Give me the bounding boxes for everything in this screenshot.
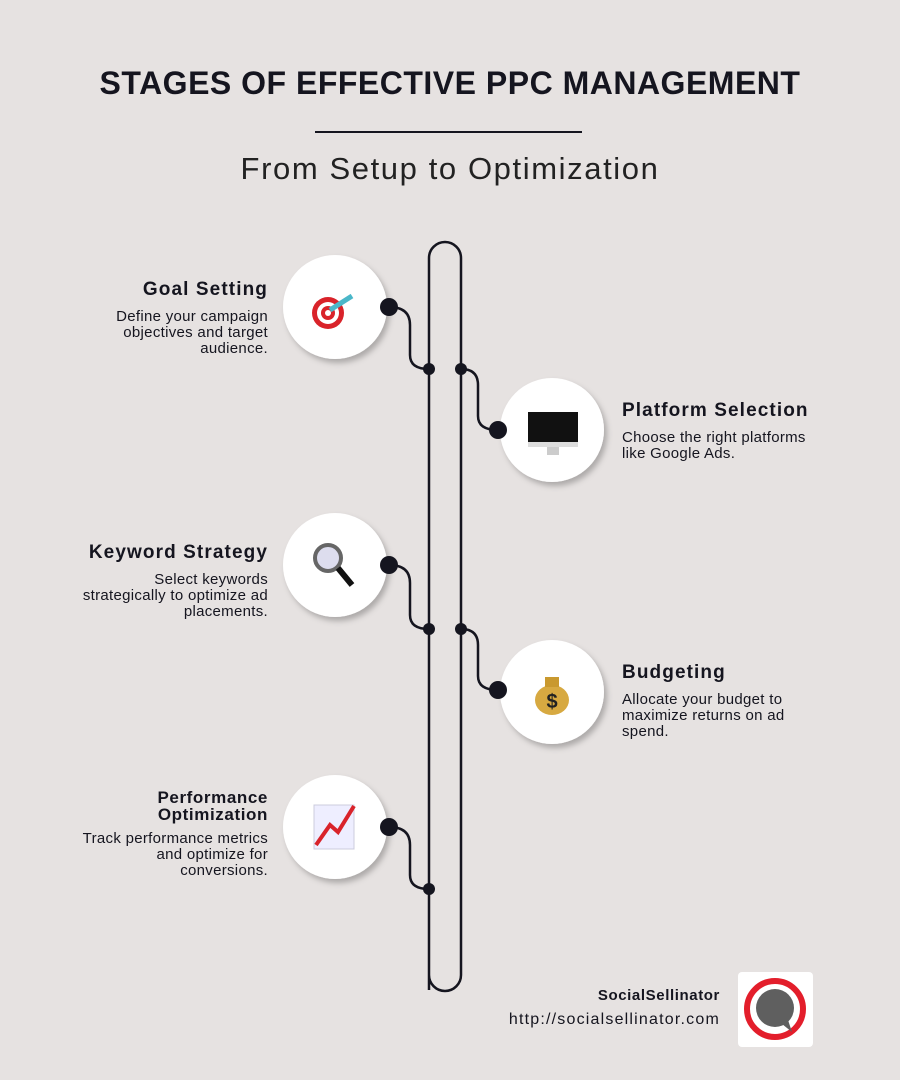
stage: performance optimization [82,788,268,879]
subtitle: From Setup to Optimization [241,151,659,186]
stage: budgeting: spend. [622,723,669,740]
stage: keyword strategy: placements. [184,603,268,620]
stage: goal setting: objectives and target [123,324,268,341]
icon: magnifier [315,545,352,585]
logo [738,972,813,1047]
stage: budgeting: Allocate your budget to [622,691,782,708]
stage: budgeting: maximize returns on ad [622,707,784,724]
stage: budgeting: Budgeting [622,662,726,683]
stage: goal setting: audience. [200,340,268,357]
stage: goal setting: Goal Setting [143,279,268,300]
stage: performance optimization: Optimization [158,805,268,824]
icon: monitor [528,412,578,455]
stage: goal setting: Define your campaign [116,308,268,325]
stage: keyword strategy [83,542,268,620]
stage: performance optimization: Track performance metrics [83,830,268,847]
title: STAGES OF EFFECTIVE PPC MANAGEMENT [100,65,800,101]
stage: performance optimization: Performance [157,788,268,807]
stage: keyword strategy: strategically to optimize ad [83,587,268,604]
icon: chart [314,805,354,849]
stage: budgeting [622,662,784,740]
stage: keyword strategy: Select keywords [154,571,268,588]
stage: goal setting [116,279,268,357]
stage: performance optimization: conversions. [180,862,268,879]
stage: platform selection [622,400,809,462]
stage: platform selection: Choose the right platforms [622,429,806,446]
icon: money bag [535,677,569,715]
footer brand [509,987,720,1028]
stage: platform selection: like Google Ads. [622,445,735,462]
icon: target [312,296,352,329]
stage: platform selection: Platform Selection [622,400,809,421]
stage: performance optimization: and optimize for [156,846,268,863]
footer brand: http://socialsellinator.com [509,1011,720,1028]
stage: keyword strategy: Keyword Strategy [89,542,268,563]
icon: money bag: $ [546,691,558,713]
footer brand: SocialSellinator [598,987,720,1004]
